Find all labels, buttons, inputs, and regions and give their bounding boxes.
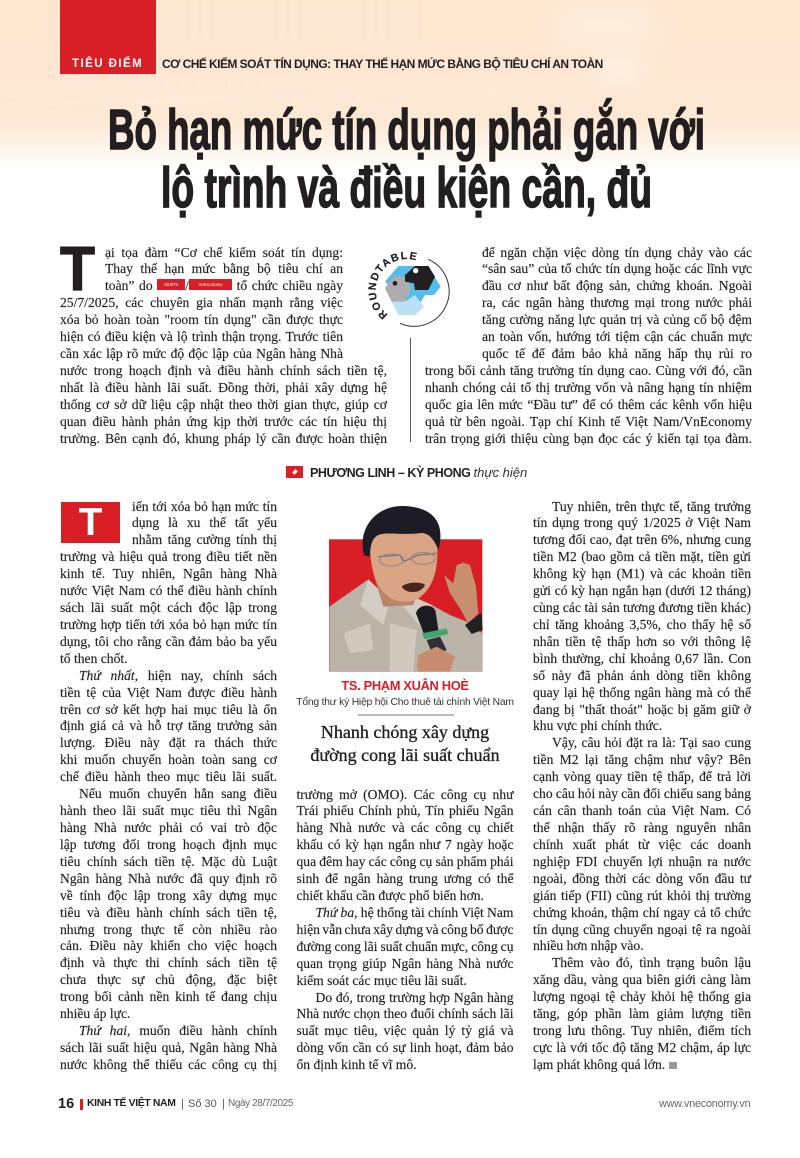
column 2 text: chiết khấu cần được phổ biến hơn. bbox=[296, 888, 484, 903]
column 1 text: về tính độc lập trong xây dựng mục bbox=[60, 888, 277, 903]
column 2 subheading: Nhanh chóng xây dựng bbox=[321, 722, 489, 742]
intro text: right column: tăng cường năng lực quản trị và củng cố bộ đệm bbox=[482, 312, 752, 327]
column 2 text: ổn định kinh tế vĩ mô. bbox=[296, 1057, 417, 1072]
icon: roundtable badge: ROUNDTABLE bbox=[368, 252, 417, 320]
intro text: right column: trong bối cảnh tăng trưởng tín dụng cao. Cùng với đó, cần bbox=[425, 363, 752, 378]
column 1 text: nhằm tăng cường tính thị bbox=[132, 532, 277, 547]
intro text: right column: quốc gia lên mức “Đầu tư” để có thêm các kênh vốn hiệu bbox=[425, 397, 752, 412]
hand bbox=[444, 563, 478, 623]
column 1 text: hành theo lãi suất mục tiêu thì Ngân bbox=[60, 803, 277, 818]
column 1 text bbox=[60, 498, 278, 1072]
intro text: left column: toàn” do / tổ chức chiều ngày bbox=[105, 278, 343, 293]
column 2 text: trường mở (OMO). Các công cụ như bbox=[296, 786, 514, 802]
column 1 text: Thứ nhất, hiện nay, chính sách bbox=[79, 668, 277, 683]
column 3 text: cán cân thanh toán của Việt Nam. Có bbox=[533, 803, 751, 818]
footer: Ngày 28/7/2025 bbox=[228, 1098, 293, 1109]
column 3 text: không kỳ hạn (M1) và các khoản tiền bbox=[533, 566, 751, 581]
column 3 text: cực là với tốc độ tăng M2 chậm, áp lực bbox=[533, 1040, 751, 1055]
column 3 text: xăng dầu, vàng qua biên giới càng làm bbox=[533, 972, 751, 987]
neck and head bbox=[373, 573, 420, 607]
section subheading: CƠ CHẾ KIỂM SOÁT TÍN DỤNG: THAY THẾ HẠN MỨC BẰNG BỘ TIÊU CHÍ AN TOÀN bbox=[162, 57, 603, 71]
column 1 text: nhiều áp lực. bbox=[60, 1006, 130, 1021]
intro text: right column: đầu cơ như bất động sản, chứng khoán. Ngoài bbox=[482, 278, 752, 293]
column 2 text: quan trọng giúp Ngân hàng Nhà nước bbox=[296, 956, 514, 971]
section tag: Tiêu điểm bbox=[60, 0, 156, 74]
column 3 text: cho câu hỏi này cần đối chiếu sang bảng bbox=[533, 786, 751, 801]
column 1 text: tiêu chính sách tiền tệ. Mặc dù Luật bbox=[60, 854, 277, 869]
column 3 text: cạnh vòng quay tiền tệ thấp, để trả lời bbox=[533, 769, 751, 784]
column 1 text: Ngân hàng Nhà nước đã quy định rõ bbox=[60, 871, 277, 886]
column 3 text: tín dụng trong quý 1/2025 ở Việt Nam bbox=[533, 515, 751, 530]
intro text: left column: 25/7/2025, các chuyên gia nhấn mạnh rằng việc bbox=[60, 295, 343, 310]
column 3 text: tiền M2 (bao gồm cả tiền mặt, tiền gửi bbox=[533, 549, 751, 564]
column 1 text: lập tương đối trong hoạch định mục bbox=[60, 837, 277, 852]
column 1 text: trường và hiệu quả trong điều tiết nền bbox=[60, 549, 277, 564]
column 1 text: tiền tệ của Việt Nam được điều hành bbox=[60, 685, 277, 700]
column 2 text: qua đêm hay các công cụ sản phẩm phái bbox=[296, 854, 514, 869]
footer: | bbox=[181, 1098, 184, 1110]
column 1 text: khi muốn chuyển hoàn toàn sang cơ bbox=[60, 752, 277, 767]
column 1 text: trường hợp tiến tới xóa bỏ hạn mức tín bbox=[60, 617, 277, 632]
column 3 text: đang bị "thất thoát" hoặc bị găm giữ ở bbox=[533, 702, 751, 717]
intro text: left column: KinhTe bbox=[164, 282, 178, 287]
column 1 text: Nếu muốn chuyển hẳn sang điều bbox=[79, 786, 277, 801]
title bbox=[108, 97, 705, 220]
column 2 text: Nhà nước chọn theo đuổi chính sách lãi bbox=[296, 1006, 514, 1021]
shirt bbox=[329, 579, 483, 672]
column 2 subheading: đường cong lãi suất chuẩn bbox=[310, 744, 500, 764]
column 3 text: gián tiếp (FII) cũng rút khỏi thị trường bbox=[533, 888, 751, 903]
footer: KINH TẾ VIỆT NAM bbox=[87, 1098, 176, 1109]
column 2 text: Do đó, trong trường hợp Ngân hàng bbox=[316, 990, 514, 1005]
speaker name: TS. PHẠM XUÂN HOÈ bbox=[341, 678, 469, 693]
column 1 text: cản. Điều này khiến cho việc hoạch bbox=[60, 938, 277, 953]
intro text: right column: “sân sau” của tổ chức tín dụng hoặc các lĩnh vực bbox=[482, 261, 752, 276]
header background band bbox=[0, 0, 800, 172]
column 3 text: Tuy nhiên, trên thực tế, tăng trưởng bbox=[552, 498, 751, 514]
column 1 text: nhưng trong thực tế còn nhiều rào bbox=[60, 922, 277, 937]
portrait photo bbox=[329, 506, 483, 672]
column 1 text: dụng, tôi cho rằng cần đảm bảo ba yếu bbox=[60, 634, 277, 649]
column 3 text: tín dụng cũng chuyển ngoại tệ ra ngoài bbox=[533, 922, 751, 937]
footer: 16 bbox=[58, 1096, 74, 1112]
intro text: right column: ra, các ngân hàng thương mại trong nước phải bbox=[482, 295, 752, 310]
column 1 text: iến tới xóa bỏ hạn mức tín bbox=[132, 498, 277, 514]
column 3 text: số này đã phản ánh dòng tiền không bbox=[533, 668, 751, 683]
intro text: left column bbox=[60, 244, 388, 446]
column 3 text: gửi có kỳ hạn ngắn hạn (dưới 12 tháng) bbox=[533, 583, 751, 598]
column 1 text: nước Việt Nam có thể điều hành chính bbox=[60, 583, 277, 598]
column 1 text: định và thực thi chính sách tiền tệ bbox=[60, 955, 277, 970]
footer bbox=[58, 1096, 750, 1112]
column 1 text: trong bối cảnh nền kinh tế đang chịu bbox=[60, 989, 277, 1004]
column 1 text: chế điều hành theo mục tiêu lãi suất. bbox=[60, 769, 277, 784]
column 3 text: trong lưu thông. Tuy nhiên, điểm tích bbox=[533, 1023, 751, 1038]
column 2 text: đường cong lãi suất chuẩn mực, công cụ bbox=[296, 939, 514, 954]
intro text: left column: thống cơ sở dữ liệu cập nhật theo thời gian thực, giúp cơ bbox=[60, 397, 387, 412]
column 2 text: dòng vốn cần có sự linh hoạt, đảm bảo bbox=[296, 1040, 514, 1055]
intro text: left column: trường. Bên cạnh đó, khung pháp lý cần được hoàn thiện bbox=[60, 431, 387, 446]
intro text: left column: xóa bỏ hoàn toàn "room tín dụng" cần được thực bbox=[60, 312, 343, 327]
column 3 text: chính xuất phát từ việc các doanh bbox=[533, 837, 751, 852]
byline: PHƯƠNG LINH – KỲ PHONG thực hiện bbox=[310, 465, 527, 480]
speaker role: Tổng thư ký Hiệp hội Cho thuê tài chính Việt Nam bbox=[296, 697, 514, 708]
column 3 text: Thêm vào đó, tình trạng buôn lậu bbox=[552, 955, 751, 970]
column 3 text: chỉ tăng khoảng 3,5%, cho thấy hệ số bbox=[533, 617, 751, 632]
intro column divider bbox=[410, 338, 411, 442]
intro text: left column: ại tọa đàm “Cơ chế kiểm soát tín dụng: bbox=[105, 244, 343, 260]
column 2 text: kiểm soát các mục tiêu lãi suất. bbox=[296, 973, 467, 988]
column 2 text: Trái phiếu Chính phủ, Tín phiếu Ngân bbox=[296, 803, 514, 818]
column 2 text: Thứ ba, hệ thống tài chính Việt Nam bbox=[316, 905, 514, 920]
column 1 text: nước không thể thiếu các công cụ thị bbox=[60, 1057, 277, 1072]
microphone bbox=[416, 606, 438, 637]
intro text: right column: quả từ bên ngoài. Tạp chí Kinh tế Việt Nam/VnEconomy bbox=[425, 414, 752, 429]
column 3 text: bình thường, chỉ khoảng 0,67 lần. Con bbox=[533, 651, 751, 666]
column 3 text: lạm phát không quá lớn. bbox=[533, 1057, 665, 1072]
icon: byline diamond bbox=[286, 466, 303, 478]
column 2 text: khấu có kỳ hạn ngắn như 7 ngày hoặc bbox=[296, 837, 514, 852]
column 3 text: tương đối cao, đạt trên 6%, nhưng cung bbox=[533, 532, 751, 547]
column 3 text: quay lại hệ thống ngân hàng mà có thể bbox=[533, 685, 751, 700]
intro text: left column: nhất là điều hành lãi suất. Đồng thời, phải xây dựng hệ bbox=[60, 380, 387, 395]
divider under role bbox=[358, 714, 454, 716]
column 1 text: lượng. Điều này đặt ra thách thức bbox=[60, 735, 277, 750]
column 3 text: nghiệp FDI chuyển lợi nhuận ra nước bbox=[533, 854, 751, 869]
column 1 text: tố then chốt. bbox=[60, 651, 128, 666]
column 3 text: nhiều hơn nhập vào. bbox=[533, 938, 644, 953]
footer: Số 30 bbox=[188, 1098, 217, 1110]
intro drop cap: T bbox=[60, 235, 95, 304]
column 1 text: dụng là xu thế tất yếu bbox=[132, 515, 277, 530]
header background band: 2021432 bbox=[163, 80, 275, 90]
column 3 text: tiền M2 lại tăng chậm như vậy? Bên bbox=[533, 752, 751, 767]
column 1 text: trên cơ sở kết hợp hai mục tiêu là ổn bbox=[60, 702, 277, 717]
column 3 text: cùng các tài sản tương đương tiền khác) bbox=[533, 600, 751, 615]
glasses bbox=[378, 553, 437, 562]
intro text: right column: nhanh chóng cải tổ thị trường vốn và nâng hạng tín nhiệm bbox=[425, 380, 752, 395]
column 3 text: ngoài, đồng thời các dòng vốn đầu tư bbox=[533, 871, 751, 886]
column 1 text: hàng Nhà nước phải có vai trò độc bbox=[60, 820, 277, 835]
red drop cap: T bbox=[79, 501, 102, 544]
footer: www.vneconomy.vn bbox=[659, 1098, 750, 1110]
column 3 text bbox=[532, 498, 752, 1072]
column 2 text bbox=[296, 786, 514, 1072]
intro text: left column: nước trong hoạch định và điều hành chính sách tiền tệ, bbox=[60, 363, 387, 378]
intro text: left column: VnEconomy bbox=[198, 282, 223, 287]
column 1 text: sách lãi suất một cách độc lập trong bbox=[60, 600, 277, 615]
column 3 text: Vậy, câu hỏi đặt ra là: Tại sao cung bbox=[552, 735, 751, 750]
intro text: right column: quốc tế để đảm bảo khả năng hấp thụ rủi ro bbox=[482, 346, 752, 361]
intro text: right column bbox=[425, 244, 752, 446]
intro text: left column: Thay thế hạn mức bằng bộ tiêu chí an bbox=[105, 261, 343, 276]
section tag: Tiêu điểm: TIÊU ĐIỂM bbox=[72, 58, 143, 70]
mouth bbox=[402, 583, 425, 592]
column 1 text: Thứ hai, muốn điều hành chính bbox=[79, 1023, 277, 1038]
intro text: left column: cần xác lập rõ mức độ độc lập của Ngân hàng Nhà bbox=[60, 346, 343, 361]
column 1 text: tiêu và điều hành chính sách tiền tệ, bbox=[60, 905, 277, 920]
footer: | bbox=[222, 1098, 225, 1110]
column 3 text: chứng khoán, thậm chí ngay cả tổ chức bbox=[533, 905, 751, 920]
intro text: left column: hiện có điều kiện và lộ trình thận trọng. Trước tiên bbox=[60, 329, 343, 344]
column 3 text: lượng ngoại tệ chảy khỏi hệ thống gia bbox=[533, 989, 751, 1004]
column 2 text: hiện vẫn chưa xây dựng và công bố được bbox=[296, 922, 514, 937]
column 2 text: hàng Nhà nước và các công cụ chiết bbox=[296, 820, 514, 835]
column 3 text: nhân tiền tệ thấp hơn so với thông lệ bbox=[533, 634, 751, 649]
lower hand bbox=[417, 647, 455, 672]
column 2 text: suất mục tiêu, việc quản lý tỷ giá và bbox=[296, 1023, 514, 1038]
intro text: right column: để ngăn chặn việc dòng tín dụng chảy vào các bbox=[482, 244, 752, 260]
column 1 text: định giá cả và hỗ trợ tăng trưởng sản bbox=[60, 718, 277, 733]
column 2 subheading bbox=[310, 722, 500, 766]
intro text: left column: quan điều hành phản ứng kịp thời trước các tín hiệu thị bbox=[60, 414, 387, 429]
column 1 text: kinh tế. Tuy nhiên, Ngân hàng Nhà bbox=[60, 566, 277, 581]
intro text: right column: trân trọng giới thiệu cùng bạn đọc các ý kiến tại tọa đàm. bbox=[425, 431, 752, 446]
red drop cap bbox=[61, 502, 120, 543]
column 2 text: sinh để ngân hàng trung ương có thể bbox=[296, 871, 514, 886]
column 3 text: khu vực phi chính thức. bbox=[533, 718, 662, 733]
icon: roundtable badge bbox=[368, 252, 450, 327]
column 1 text: chưa thực sự chủ động, đặc biệt bbox=[60, 972, 277, 987]
column 1 text: sách lãi suất hiệu quả, Ngân hàng Nhà bbox=[60, 1040, 277, 1055]
column 3 text: tăng, góp phần làm giảm lượng tiền bbox=[533, 1006, 751, 1021]
intro text: right column: an toàn vốn, hướng tới tiệm cận các chuẩn mực bbox=[482, 329, 752, 344]
column 3 text: thể nhận thấy rõ ràng nguyên nhân bbox=[533, 820, 751, 835]
